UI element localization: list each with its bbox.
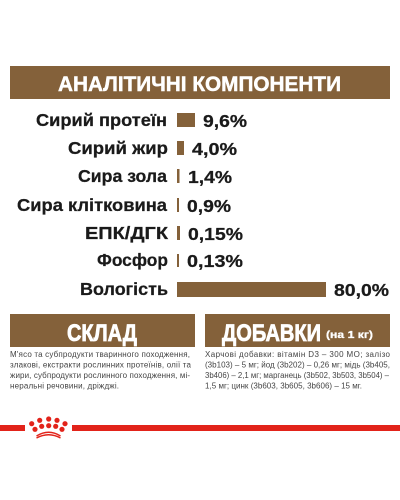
text block: composition: злакові, екстракти рослинних протеїнів, олії та	[10, 360, 192, 370]
text block: composition: М'ясо та субпродукти тваринного походження,	[10, 350, 190, 359]
row: crude protein: 9,6%	[203, 111, 247, 131]
row: crude fat: 4,0%	[192, 139, 237, 159]
text block: additives: Харчові добавки: вітамін D3 – 300 МО; залізо	[205, 350, 391, 359]
panel: composition heading	[10, 314, 195, 347]
row: moisture: Вологість	[80, 279, 168, 299]
row: phosphorus: Фосфор	[97, 250, 168, 270]
panel: composition heading: СКЛАД	[67, 320, 137, 347]
text block: additives: 3b406) – 2,1 мг; марганець (3b502, 3b503, 3b504) –	[205, 371, 390, 380]
row: phosphorus: 0,13%	[187, 251, 243, 271]
panel: analytical components heading: АНАЛІТИЧНІ КОМПОНЕНТИ	[58, 72, 341, 96]
row: phosphorus	[97, 250, 243, 271]
bar chart: analytical components	[17, 110, 389, 300]
text block: composition	[10, 350, 192, 390]
text block: additives: 1,5 мг; цинк (3b603, 3b605, 3b606) – 15 мг.	[205, 382, 362, 390]
row: crude fibre	[17, 195, 231, 216]
row: crude ash: Сира зола	[78, 166, 167, 186]
panel: additives heading: ДОБАВКИ	[222, 320, 321, 347]
panel: additives heading: (на 1 кг)	[326, 329, 373, 341]
text block: additives: (3b103) – 5 мг; йод (3b202) – 0,26 мг; мідь (3b405,	[205, 360, 390, 370]
row: EPA/DHA: 0,15%	[188, 224, 243, 244]
row: crude ash	[78, 166, 232, 187]
row: moisture: 80,0%	[334, 280, 389, 300]
text block: additives	[205, 350, 391, 390]
row: crude protein	[36, 110, 247, 131]
row: crude fat: Сирий жир	[68, 138, 168, 158]
text block: composition: жири, субпродукти рослинного походження, мі-	[10, 371, 190, 380]
row: crude fat	[68, 138, 237, 159]
row: EPA/DHA	[85, 223, 243, 244]
row: EPA/DHA: ЕПК/ДГК	[85, 223, 168, 243]
text block: composition: неральні речовини, дріжджі.	[10, 382, 119, 390]
logo: red line with crown	[0, 416, 400, 438]
row: crude fibre: Сира клітковина	[17, 195, 167, 215]
row: crude fibre: 0,9%	[187, 196, 231, 216]
row: crude ash: 1,4%	[188, 167, 232, 187]
row: crude protein: Сирий протеїн	[36, 110, 167, 130]
panel: additives heading	[205, 314, 390, 347]
row: moisture	[80, 279, 389, 300]
panel: analytical components heading	[10, 66, 390, 99]
